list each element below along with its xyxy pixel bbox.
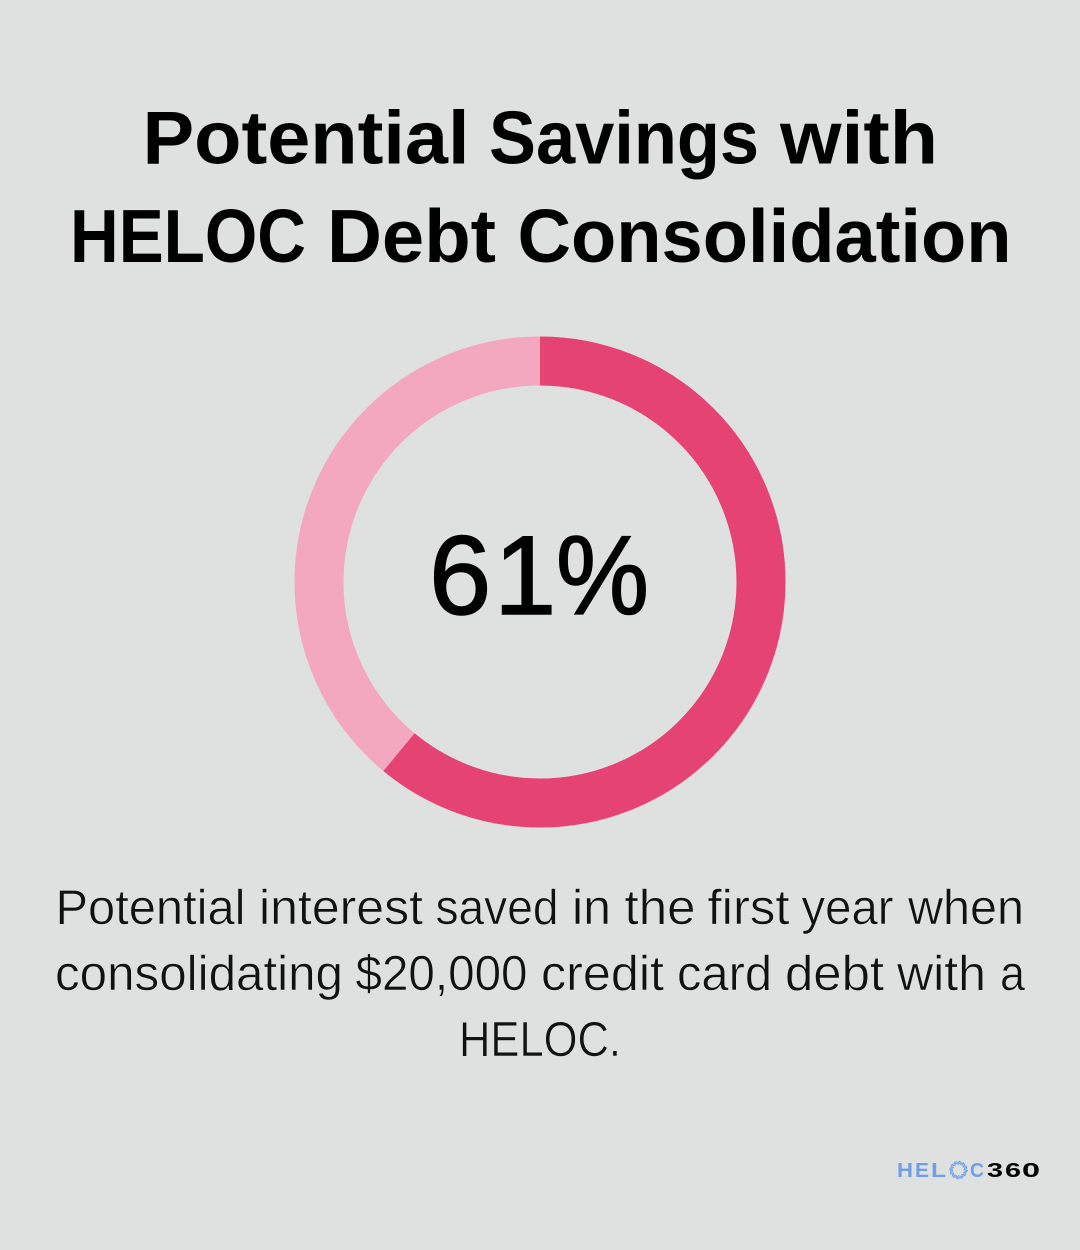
title: Debt	[327, 194, 496, 278]
description text: with	[896, 947, 986, 1001]
description text: first	[708, 881, 790, 935]
logo: HELOC360: H	[897, 1160, 913, 1182]
title: Consolidation	[518, 194, 1012, 278]
description text: debt	[785, 947, 884, 1001]
title: Savings	[489, 96, 759, 180]
description text: interest	[259, 881, 423, 935]
description text: in	[572, 881, 611, 935]
description text: when	[907, 881, 1024, 935]
logo: HELOC360: 6	[1005, 1160, 1021, 1182]
description text: a	[1000, 947, 1026, 1001]
logo: HELOC360: 0	[1022, 1160, 1040, 1182]
description text: saved	[436, 881, 558, 935]
title: Potential	[142, 96, 470, 180]
title: with	[779, 96, 938, 180]
description text: year	[802, 881, 894, 935]
description text: the	[624, 881, 696, 935]
donut value: 1	[494, 513, 556, 638]
description text: consolidating	[55, 947, 343, 1001]
logo: HELOC360: 3	[987, 1160, 1003, 1182]
description text: card	[677, 947, 772, 1001]
logo: HELOC360: C	[970, 1160, 984, 1182]
icon: logo swirl	[948, 1160, 969, 1180]
description text	[55, 881, 1026, 1067]
donut value	[429, 513, 649, 638]
description text: Potential	[56, 881, 246, 935]
description text: HELOC.	[459, 1013, 621, 1067]
donut value: 6	[429, 513, 491, 638]
title	[70, 96, 1012, 278]
title: HELOC	[70, 194, 306, 278]
logo: HELOC360: E	[915, 1160, 929, 1182]
donut chart: 61%	[319, 361, 761, 803]
description text: $20,000	[356, 947, 528, 1001]
donut value: %	[556, 513, 649, 638]
logo: HELOC360: L	[931, 1160, 946, 1182]
logo: HELOC360	[897, 1160, 1040, 1182]
description text: credit	[541, 947, 664, 1001]
